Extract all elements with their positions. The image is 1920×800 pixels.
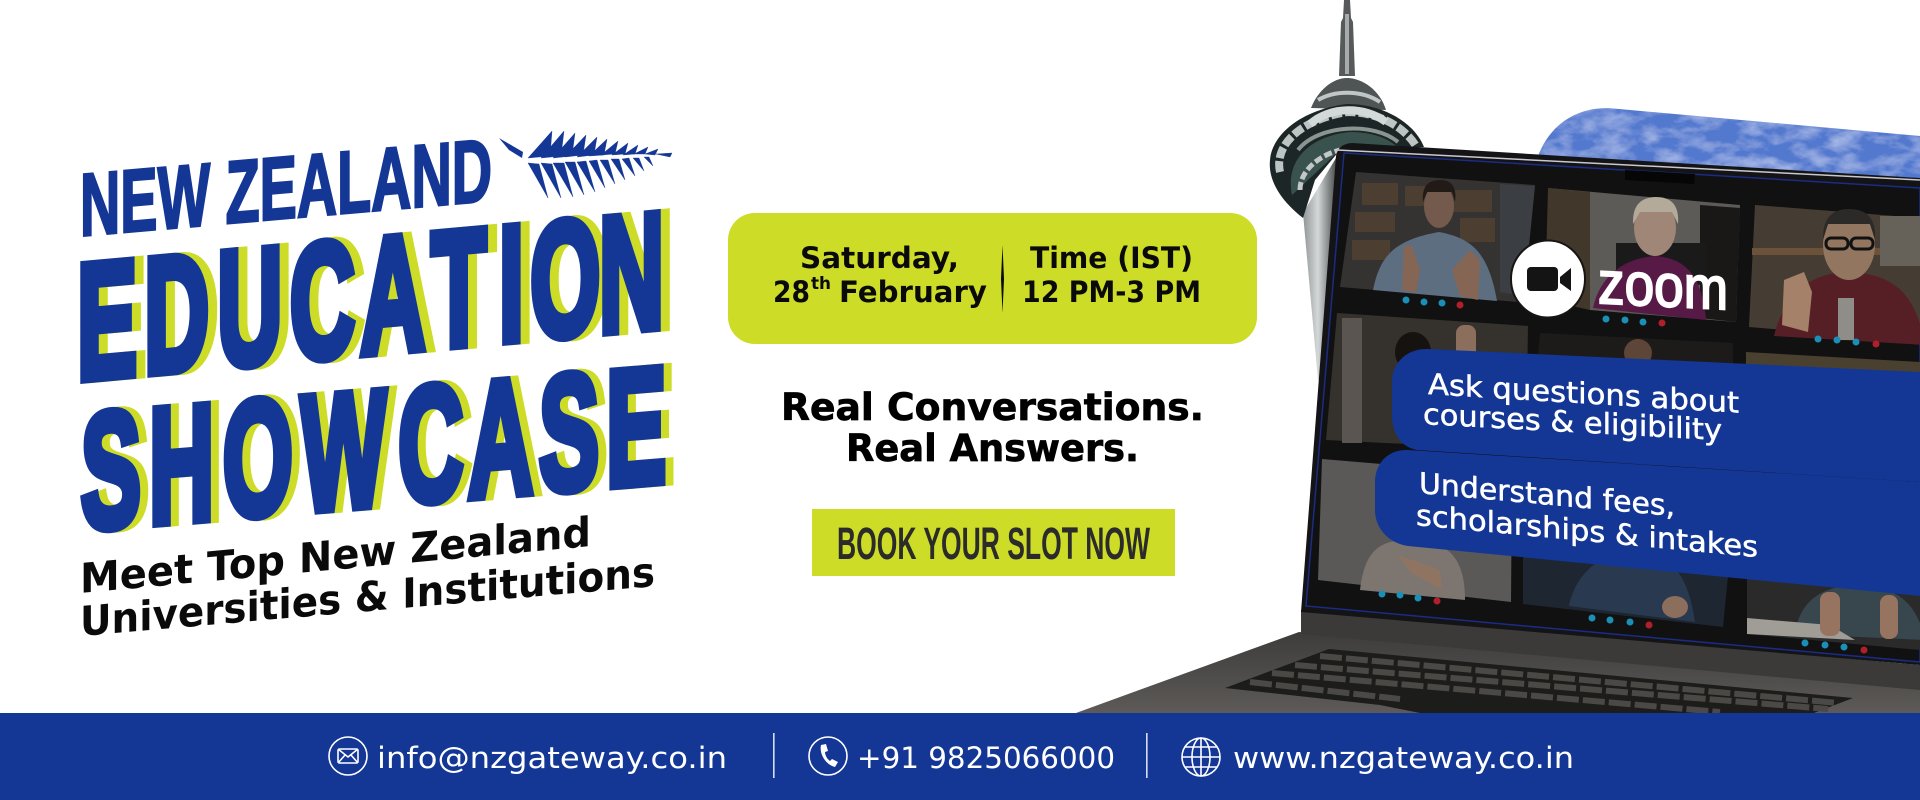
hinge band	[1301, 610, 1920, 690]
subtitle: Universities & Institutions	[80, 548, 655, 646]
illustration: laptop	[1076, 143, 1920, 713]
tile: row three left	[1318, 459, 1512, 602]
heading line: EDUCATION: EDUCATION	[77, 179, 664, 415]
video call tiles	[1318, 172, 1920, 654]
date: Saturday,	[800, 241, 959, 275]
zoom logo: zoom	[1598, 249, 1728, 322]
callout: ask questions	[1392, 349, 1920, 482]
callout: understand fees	[1375, 450, 1920, 596]
time: 12 PM-3 PM	[1022, 275, 1201, 309]
tile: row two left	[1326, 313, 1528, 450]
contact: email: info@nzgateway.co.in	[377, 741, 727, 775]
icon: globe	[1182, 738, 1220, 776]
date and time pill	[728, 213, 1257, 344]
illustration: blue watercolour backdrop	[1538, 108, 1920, 200]
footer bar	[0, 713, 1920, 800]
laptop deck	[1076, 632, 1920, 713]
tile: row two right	[1746, 352, 1920, 372]
screen	[1306, 153, 1920, 662]
callout: ask questions: courses & eligibility	[1423, 397, 1722, 447]
icon: phone	[809, 737, 847, 775]
button: book your slot now: BOOK YOUR SLOT NOW	[837, 518, 1150, 569]
date: 28	[773, 275, 810, 309]
tagline: Real Conversations.	[781, 386, 1204, 429]
tile: woman with headset	[1545, 188, 1740, 322]
status dots	[1378, 296, 1880, 654]
tagline	[781, 386, 1204, 470]
heading line: SHOWCASE: SHOWCASE	[81, 334, 666, 565]
callout: understand fees: scholarships & intakes	[1416, 498, 1758, 564]
button: book your slot now	[812, 509, 1175, 576]
tile: man in blue shirt with bookshelf	[1340, 172, 1535, 302]
date	[773, 241, 987, 309]
illustration: sky tower	[1270, 0, 1424, 380]
icon: zoom camera	[1511, 240, 1585, 318]
date: February	[839, 275, 987, 309]
camera notch	[1625, 170, 1695, 184]
heading line: EDUCATION: EDUCATION	[86, 178, 673, 414]
time: Time (IST)	[1030, 241, 1193, 275]
keyboard	[1225, 649, 1853, 713]
callout: ask questions: Ask questions about	[1428, 367, 1739, 420]
contact: website: www.nzgateway.co.in	[1233, 741, 1574, 775]
icon: silver fern	[499, 131, 672, 198]
time	[1022, 241, 1201, 309]
tile: smiling man in plaid	[1749, 205, 1920, 345]
heading line: SHOWCASE: SHOWCASE	[89, 333, 674, 564]
tagline: Real Answers.	[846, 427, 1139, 470]
contact: phone: +91 9825066000	[857, 741, 1115, 775]
title: New Zealand Education Showcase	[77, 120, 674, 646]
callout: understand fees: Understand fees,	[1419, 466, 1675, 523]
heading line: NEW ZEALAND: NEW ZEALAND	[80, 120, 492, 255]
tile: row two centre	[1538, 333, 1733, 363]
zoom logo	[1511, 240, 1728, 322]
tile: row three centre	[1523, 557, 1728, 627]
tile: row three right	[1747, 579, 1920, 650]
date: th	[811, 274, 831, 294]
icon: envelope	[329, 737, 367, 775]
subtitle: Meet Top New Zealand	[80, 508, 591, 603]
laptop lid	[1301, 143, 1920, 665]
